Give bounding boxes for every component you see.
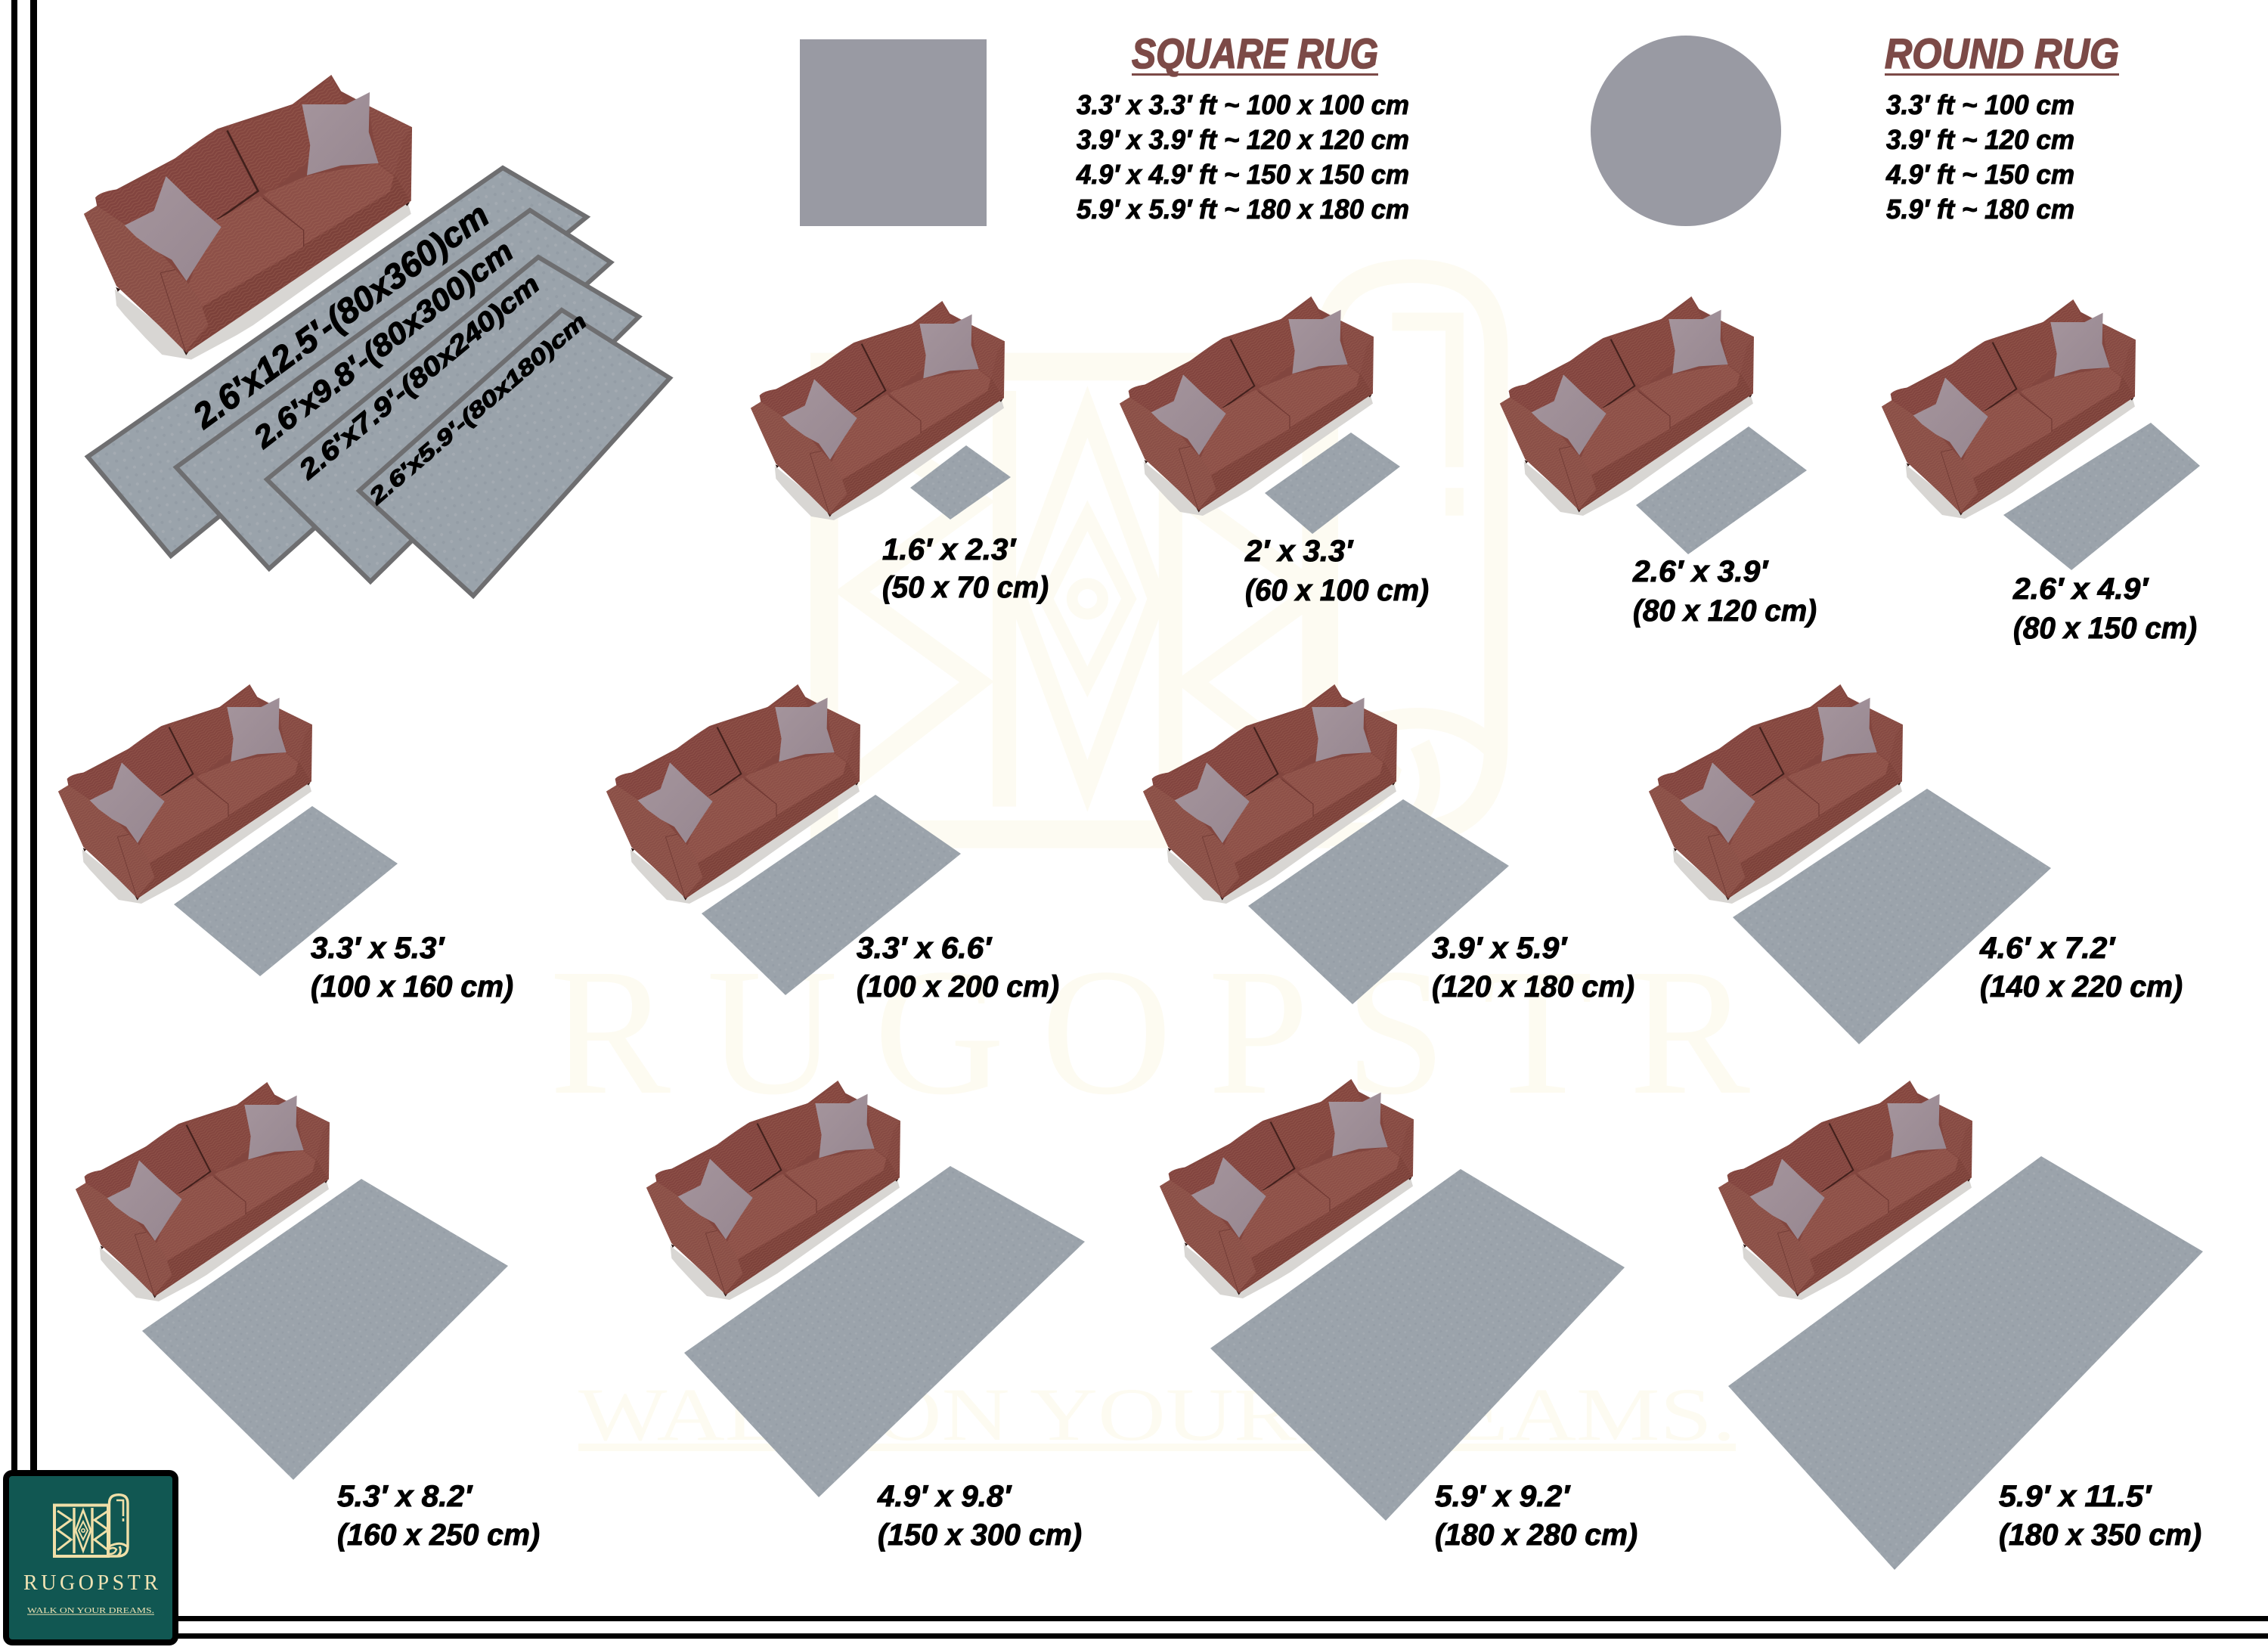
square rug swatch (800, 39, 987, 226)
tagline: WALK ON YOUR DREAMS. (27, 1606, 154, 1615)
panel: square rug (800, 29, 1409, 226)
runner rug 2.6 x 12.5 (88, 168, 587, 556)
runner rug 2.6 x 5.9: 2.6′x5.9′-(80x180)cm (364, 309, 592, 510)
size item: 180 x 280 cm: (180 x 280 cm) (1435, 1518, 1637, 1552)
size item: 100 x 200 cm: 3.3′ x 6.6′ (857, 932, 993, 965)
size item: 60 x 100 cm (1120, 296, 1429, 607)
round rug swatch (1591, 36, 1781, 226)
size item: 160 x 250 cm (76, 1082, 540, 1552)
runner rug 2.6 x 9.8: 2.6′x9.8′-(80x300)cm (247, 234, 519, 455)
size item: 180 x 350 cm: (180 x 350 cm) (1999, 1518, 2201, 1552)
square rug size list: 5.9′ x 5.9′ ft ~ 180 x 180 cm (1077, 194, 1409, 225)
round rug size list (1885, 89, 2074, 225)
size item: 180 x 350 cm (1718, 1081, 2203, 1570)
round rug size list: 5.9′ ft ~ 180 cm (1886, 194, 2074, 225)
round rug size list: 3.3′ ft ~ 100 cm (1886, 89, 2074, 120)
size item: 80 x 150 cm: (80 x 150 cm) (2013, 612, 2197, 645)
icon: rolled rug (54, 1495, 128, 1556)
size item: 50 x 70 cm: 1.6′ x 2.3′ (882, 533, 1017, 566)
size item: 80 x 120 cm (1500, 296, 1817, 628)
panel: round rug (1591, 29, 2119, 226)
size item: 120 x 180 cm: (120 x 180 cm) (1432, 970, 1634, 1003)
runner rug 2.6 x 9.8 (176, 210, 611, 569)
runner rug 2.6 x 12.5: 2.6′x12.5′-(80x360)cm (184, 195, 496, 436)
runner rug 2.6 x 7.9: 2.6′x7.9′-(80x240)cm (293, 269, 545, 485)
size item: 80 x 150 cm (1882, 299, 2200, 645)
watermark: brand logo (550, 271, 1750, 1456)
size item: 50 x 70 cm (751, 301, 1049, 604)
size item: 120 x 180 cm: 3.9′ x 5.9′ (1432, 932, 1568, 965)
size item: 140 x 220 cm: 4.6′ x 7.2′ (1979, 932, 2116, 965)
size item: 80 x 120 cm: (80 x 120 cm) (1633, 594, 1817, 628)
size item: 80 x 150 cm: 2.6′ x 4.9′ (2012, 572, 2149, 606)
size item: 160 x 250 cm: 5.3′ x 8.2′ (337, 1480, 473, 1513)
size item: 100 x 160 cm (58, 684, 513, 1003)
logo badge (6, 1473, 175, 1642)
size item: 150 x 300 cm (646, 1081, 1085, 1552)
runner rug 2.6 x 7.9 (267, 257, 639, 582)
round rug size list: 4.9′ ft ~ 150 cm (1885, 159, 2074, 190)
size item: 100 x 200 cm: (100 x 200 cm) (857, 970, 1059, 1003)
size item: 180 x 350 cm: 5.9′ x 11.5′ (1999, 1480, 2152, 1513)
square rug size list (1076, 89, 1409, 225)
size item: 100 x 160 cm: 3.3′ x 5.3′ (311, 932, 445, 965)
size item: 120 x 180 cm (1143, 684, 1634, 1004)
size item: 180 x 280 cm: 5.9′ x 9.2′ (1435, 1480, 1571, 1513)
size item: 60 x 100 cm: 2′ x 3.3′ (1244, 535, 1354, 568)
size item: 100 x 200 cm (606, 684, 1059, 1003)
round rug size list: 3.9′ ft ~ 120 cm (1886, 124, 2074, 155)
size item: 140 x 220 cm (1649, 684, 2183, 1044)
size item: 50 x 70 cm: (50 x 70 cm) (882, 571, 1049, 604)
sofa: runner panel (84, 75, 412, 359)
square rug size list: 4.9′ x 4.9′ ft ~ 150 x 150 cm (1076, 159, 1409, 190)
size item: 150 x 300 cm: (150 x 300 cm) (878, 1518, 1082, 1552)
watermark brand name: RUGOPSTR (550, 931, 1750, 1132)
size item: 60 x 100 cm: (60 x 100 cm) (1245, 574, 1429, 607)
square rug size list: 3.3′ x 3.3′ ft ~ 100 x 100 cm (1077, 89, 1409, 120)
size item: 150 x 300 cm: 4.9′ x 9.8′ (877, 1480, 1012, 1513)
panel: runner sizes (84, 75, 670, 596)
watermark tagline: WALK ON YOUR DREAMS. (578, 1372, 1736, 1456)
square rug size list: 3.9′ x 3.9′ ft ~ 120 x 120 cm (1077, 124, 1409, 155)
square rug heading: SQUARE RUG (1132, 29, 1378, 77)
runner rug 2.6 x 5.9 (359, 309, 670, 596)
brand name: RUGOPSTR (23, 1571, 158, 1595)
size item: 100 x 160 cm: (100 x 160 cm) (311, 970, 513, 1003)
size item: 160 x 250 cm: (160 x 250 cm) (337, 1518, 540, 1552)
round rug heading: ROUND RUG (1885, 29, 2119, 77)
size item: 80 x 120 cm: 2.6′ x 3.9′ (1632, 555, 1769, 588)
watermark icon (824, 271, 1496, 834)
size item: 180 x 280 cm (1160, 1079, 1637, 1552)
size item: 140 x 220 cm: (140 x 220 cm) (1980, 970, 2183, 1003)
